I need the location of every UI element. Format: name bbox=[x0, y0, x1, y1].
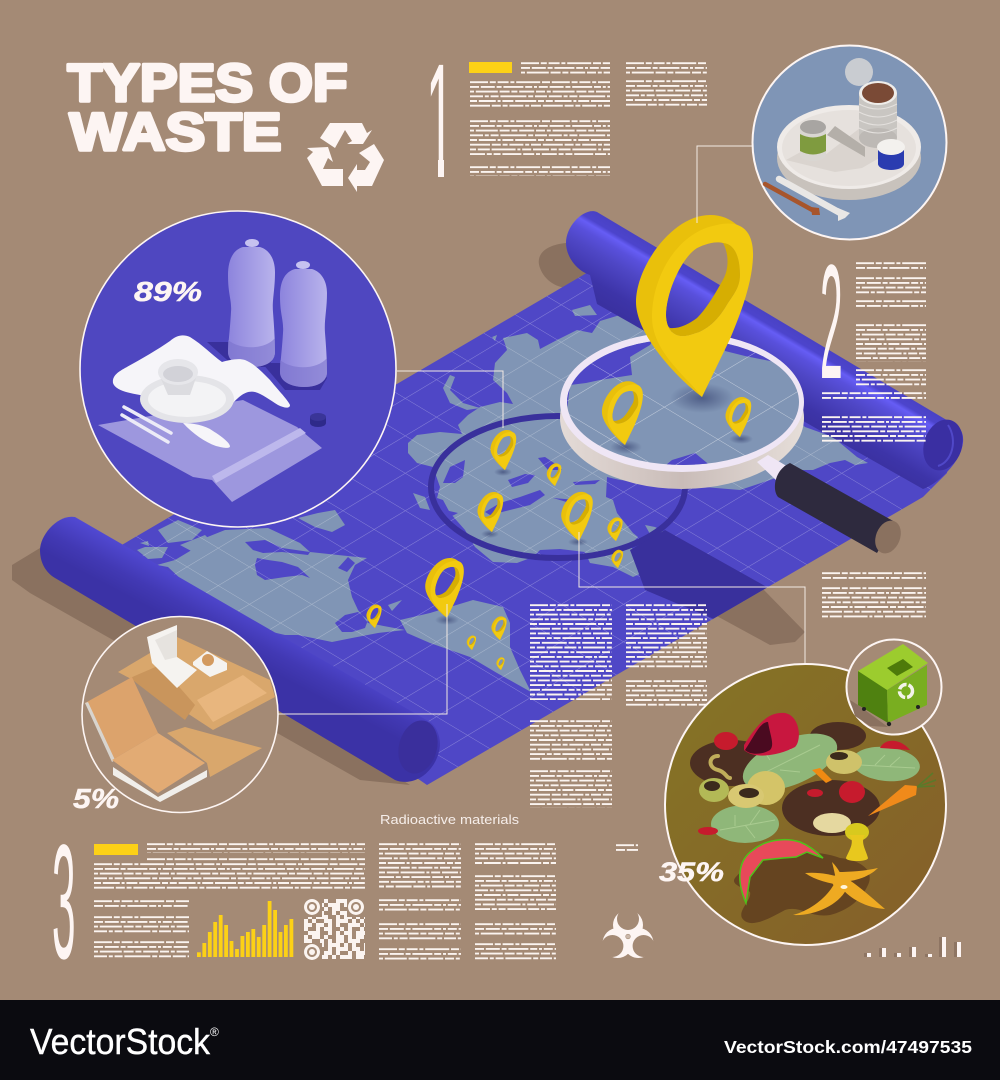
lower roll end bbox=[393, 716, 443, 778]
inland seas bbox=[443, 457, 600, 517]
text block bbox=[470, 81, 610, 109]
text block bbox=[94, 863, 365, 891]
pin: large main bbox=[636, 215, 753, 397]
numeral 1 bbox=[430, 64, 444, 177]
map pins bbox=[366, 430, 623, 670]
white bag bbox=[113, 335, 290, 448]
text block bbox=[379, 843, 461, 890]
red scraps bbox=[698, 732, 910, 835]
pin: asia 1 bbox=[490, 430, 516, 470]
text block bbox=[475, 843, 556, 866]
yellow tag 3 bbox=[94, 844, 138, 855]
scandinavia bbox=[443, 375, 480, 410]
text block bbox=[626, 604, 707, 670]
text block bbox=[147, 843, 365, 853]
pin: lens right bbox=[725, 397, 751, 437]
magnifier sheet shadow bbox=[630, 530, 767, 619]
magnifier rim bbox=[560, 332, 804, 472]
text block bbox=[94, 941, 189, 959]
blue spool bbox=[877, 139, 905, 170]
footer logo: ® bbox=[210, 1025, 219, 1039]
circle background bbox=[80, 211, 396, 527]
text block bbox=[530, 720, 612, 762]
cutlery bbox=[122, 407, 171, 442]
percentage 5: 5% bbox=[73, 783, 119, 814]
bottle shadows bbox=[207, 342, 327, 390]
circle background bbox=[82, 616, 278, 812]
watermelon rind bbox=[740, 840, 823, 903]
map sheet bbox=[100, 271, 950, 785]
cup bbox=[158, 359, 198, 395]
text block bbox=[379, 948, 461, 962]
cream scrap bbox=[813, 813, 851, 833]
pin shadows bbox=[435, 468, 588, 625]
panel: metal waste bbox=[752, 46, 946, 240]
eurasia and africa bbox=[408, 310, 868, 577]
pin: south america 4 bbox=[496, 657, 505, 670]
text block bbox=[470, 166, 610, 176]
text block bbox=[856, 262, 926, 271]
bottle 1 bbox=[228, 239, 275, 367]
text block bbox=[626, 62, 707, 76]
text block bbox=[530, 770, 612, 808]
center text columns bbox=[530, 604, 707, 808]
plastic film bbox=[98, 400, 322, 502]
circle background bbox=[752, 46, 946, 240]
percentage 35: 35% bbox=[659, 857, 724, 887]
text block bbox=[856, 324, 926, 362]
text block bbox=[379, 923, 461, 941]
text block bbox=[856, 300, 926, 309]
icon: bin recycle mark bbox=[900, 684, 912, 698]
cardboard stack bbox=[118, 637, 275, 730]
title bbox=[68, 54, 348, 162]
map scene bbox=[12, 211, 969, 790]
dirt patches bbox=[690, 722, 880, 836]
section 2 bbox=[820, 231, 926, 619]
apple core bbox=[845, 823, 869, 861]
pin: asia 5 bbox=[607, 517, 623, 541]
footer logo: VectorStock bbox=[30, 1021, 211, 1062]
pin: lens left bbox=[602, 381, 643, 445]
magnifier wall bbox=[560, 347, 804, 489]
tray bbox=[777, 105, 921, 200]
text block bbox=[379, 899, 461, 913]
text block bbox=[475, 875, 556, 912]
lid bbox=[845, 58, 873, 86]
south america bbox=[400, 600, 531, 692]
ground shadow bbox=[734, 852, 870, 923]
text block bbox=[626, 680, 707, 708]
text block bbox=[626, 80, 707, 108]
north america bbox=[157, 528, 405, 642]
magnifier handle bbox=[757, 455, 905, 557]
numeral 3: 3 bbox=[52, 812, 76, 994]
panel: plastic waste bbox=[80, 211, 396, 527]
bar chart bbox=[197, 901, 293, 957]
qr code bbox=[303, 899, 366, 961]
pin: asia 4 bbox=[561, 492, 593, 541]
text block bbox=[94, 900, 189, 909]
upper map roll bbox=[566, 211, 963, 489]
numeral 1: 1 bbox=[426, 30, 454, 212]
tin can bbox=[859, 81, 897, 148]
magnifier ground shadow bbox=[715, 588, 805, 645]
lens bbox=[567, 342, 799, 465]
section 1 bbox=[430, 62, 707, 177]
title: TYPES OF bbox=[68, 54, 348, 113]
open pizza box bbox=[85, 677, 207, 802]
roll shadows bbox=[12, 243, 600, 785]
pin: south america 2 bbox=[491, 616, 507, 640]
bin slot bbox=[887, 659, 913, 676]
footer band bbox=[0, 1000, 1000, 1080]
text block bbox=[530, 604, 612, 700]
connector lines bbox=[278, 146, 805, 714]
bin wheels bbox=[862, 705, 920, 726]
banana peel bbox=[793, 862, 885, 915]
map grid bbox=[136, 278, 931, 767]
circle background bbox=[665, 664, 946, 945]
mini bars bbox=[864, 937, 961, 957]
greenland bbox=[298, 510, 345, 532]
pin: asia 6 bbox=[611, 550, 623, 568]
text block bbox=[616, 844, 638, 853]
white food box bbox=[147, 625, 227, 688]
section 3 bbox=[52, 812, 638, 994]
numeral 2: 2 bbox=[820, 231, 843, 414]
bin right face bbox=[887, 665, 927, 723]
text block bbox=[475, 943, 556, 961]
cabbage leaves bbox=[711, 722, 922, 843]
text block bbox=[822, 392, 926, 401]
pin: central america bbox=[366, 604, 382, 628]
text block bbox=[521, 62, 610, 76]
islands bbox=[413, 305, 665, 534]
label: radioactive materials: Radioactive materials bbox=[380, 813, 519, 827]
pin: south america 3 bbox=[467, 635, 476, 650]
carrot bbox=[812, 768, 936, 816]
text block bbox=[475, 923, 556, 937]
footer url: VectorStock.com/47497535 bbox=[724, 1037, 972, 1057]
continents bbox=[137, 305, 868, 692]
pin: asia 2 bbox=[547, 463, 561, 486]
percentage 89: 89% bbox=[134, 276, 202, 307]
text block bbox=[94, 916, 189, 934]
text block bbox=[470, 120, 610, 157]
text block bbox=[147, 858, 365, 863]
yellow tag 1 bbox=[469, 62, 512, 73]
circle background bbox=[846, 640, 942, 734]
text block bbox=[856, 369, 926, 387]
text block bbox=[822, 416, 926, 444]
bin left face bbox=[858, 671, 888, 723]
bottle cap bbox=[310, 413, 326, 427]
plate bbox=[140, 375, 234, 423]
white wrench bbox=[779, 179, 850, 221]
lower map roll bbox=[40, 517, 440, 782]
icon: biohazard bbox=[601, 908, 655, 958]
bin shadow bbox=[850, 700, 888, 727]
arctic islands bbox=[137, 520, 402, 611]
text block bbox=[822, 572, 926, 581]
panel: food waste bbox=[659, 664, 946, 945]
text block bbox=[822, 587, 926, 619]
flat cardboard bbox=[167, 727, 262, 777]
brown wrench bbox=[765, 184, 820, 215]
bottle 2 bbox=[280, 261, 327, 387]
region ring bbox=[431, 416, 685, 558]
icon: recycle bbox=[307, 123, 384, 192]
peel bbox=[710, 756, 730, 778]
pin: south america large bbox=[425, 558, 464, 618]
blade bbox=[827, 126, 865, 157]
upper roll end bbox=[917, 414, 969, 476]
text block bbox=[856, 277, 926, 295]
pin: asia 3 bbox=[477, 492, 503, 532]
panel: cardboard waste bbox=[73, 616, 278, 814]
green can bbox=[800, 120, 826, 161]
title: WASTE bbox=[70, 103, 282, 162]
magnifier bbox=[560, 330, 905, 557]
bin top bbox=[858, 644, 928, 690]
potatoes bbox=[699, 750, 862, 808]
panel: recycling bin bbox=[846, 640, 942, 734]
red pepper bbox=[744, 713, 799, 756]
